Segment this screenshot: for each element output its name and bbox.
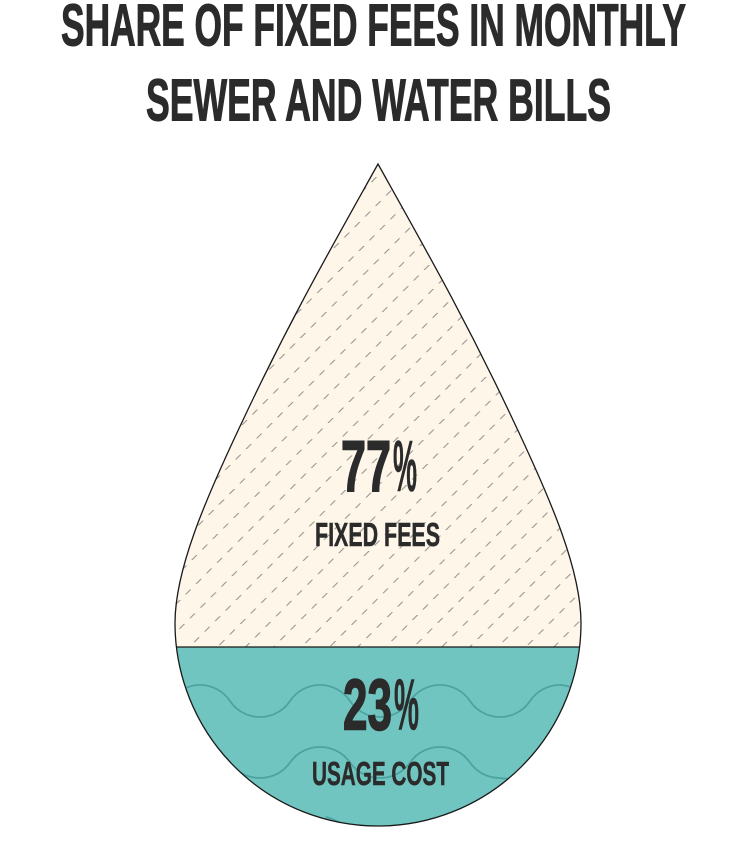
value 77%: 77 (341, 427, 391, 507)
label: fixed fees (315, 427, 440, 553)
caption fixed fees: FIXED FEES (315, 516, 440, 553)
segment: fixed fees 77% (170, 160, 585, 647)
title (61, 0, 686, 134)
caption usage cost: USAGE COST (312, 755, 449, 792)
drop outline (175, 164, 581, 826)
value 23%: 23 (343, 666, 392, 746)
label: usage cost: % (394, 666, 419, 746)
segment: usage cost 23% (170, 647, 585, 832)
label: fixed fees: % (393, 427, 417, 507)
water drop chart (170, 160, 585, 832)
divider between segments (176, 646, 580, 648)
label: usage cost (312, 666, 449, 792)
